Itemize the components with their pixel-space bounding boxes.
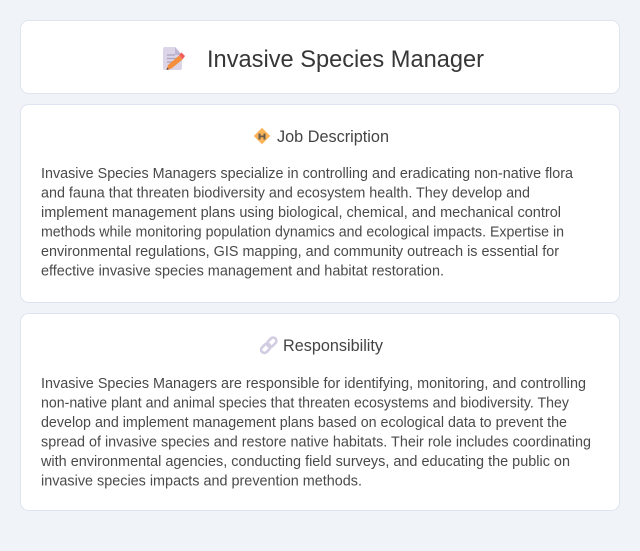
text block: responsibility <box>40 376 591 490</box>
panel: title <box>20 20 620 94</box>
text block: job description: environmental regulations, GIS mapping, and community outreach is essential for <box>41 244 559 260</box>
text block: responsibility: Invasive Species Managers are responsible for identifying, monitoring, and controlling <box>41 376 586 392</box>
heading: responsibility: Responsibility <box>283 337 384 355</box>
text block: responsibility: non-native plant and animal species that threaten ecosystems and biodiversity. They <box>41 396 570 412</box>
text block: responsibility: invasive species impacts and prevention methods. <box>41 474 362 490</box>
icon: document with pencil <box>163 47 185 70</box>
icon: chain link <box>260 336 278 354</box>
text block: responsibility: spread of invasive species and restore native habitats. Their role includes coordinating <box>41 435 591 451</box>
text block: responsibility: develop and implement management plans based on ecological data to prevent the <box>41 415 567 431</box>
text block: responsibility: with environmental agencies, conducting field surveys, and educating the public on <box>40 454 570 470</box>
heading: title: Invasive Species Manager <box>207 46 484 73</box>
text block: job description: and fauna that threaten biodiversity and ecosystem health. They develop and <box>41 186 530 202</box>
text block: job description <box>41 166 574 280</box>
text block: job description: methods while monitoring population dynamics and ecological impacts. Expertise in <box>41 225 564 241</box>
heading: job description: Job Description <box>277 128 389 146</box>
panel: job description <box>20 104 620 302</box>
text block: job description: effective invasive species management and habitat restoration. <box>41 264 444 280</box>
panel: responsibility <box>20 314 620 510</box>
text block: job description: implement management plans using biological, chemical, and mechanical control <box>41 205 561 221</box>
text block: job description: Invasive Species Managers specialize in controlling and eradicating non-native flora <box>41 166 574 182</box>
icon: orange diamond <box>254 128 270 144</box>
